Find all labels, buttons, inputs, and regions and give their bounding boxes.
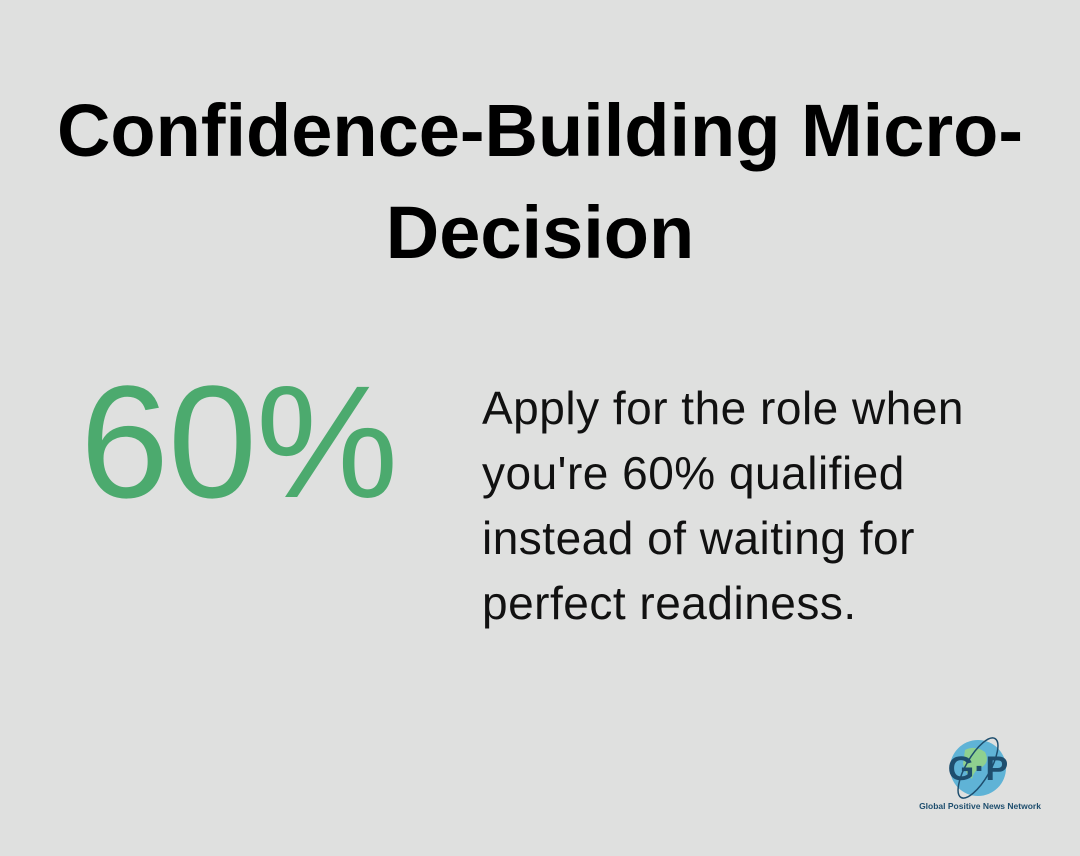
title: Confidence-Building Micro- xyxy=(57,89,1023,172)
logo: Global Positive News Network: G·P xyxy=(948,750,1008,788)
description text: Apply for the role when xyxy=(482,382,964,434)
stat: 60%: 60% xyxy=(80,352,397,531)
description text xyxy=(482,382,964,629)
description text: instead of waiting for xyxy=(482,512,915,564)
description text: you're 60% qualified xyxy=(482,447,905,499)
logo: Global Positive News Network xyxy=(919,737,1041,811)
title xyxy=(57,89,1023,274)
logo: Global Positive News Network: Global Positive News Network xyxy=(919,801,1041,811)
description text: perfect readiness. xyxy=(482,577,857,629)
title: Decision xyxy=(386,191,694,274)
